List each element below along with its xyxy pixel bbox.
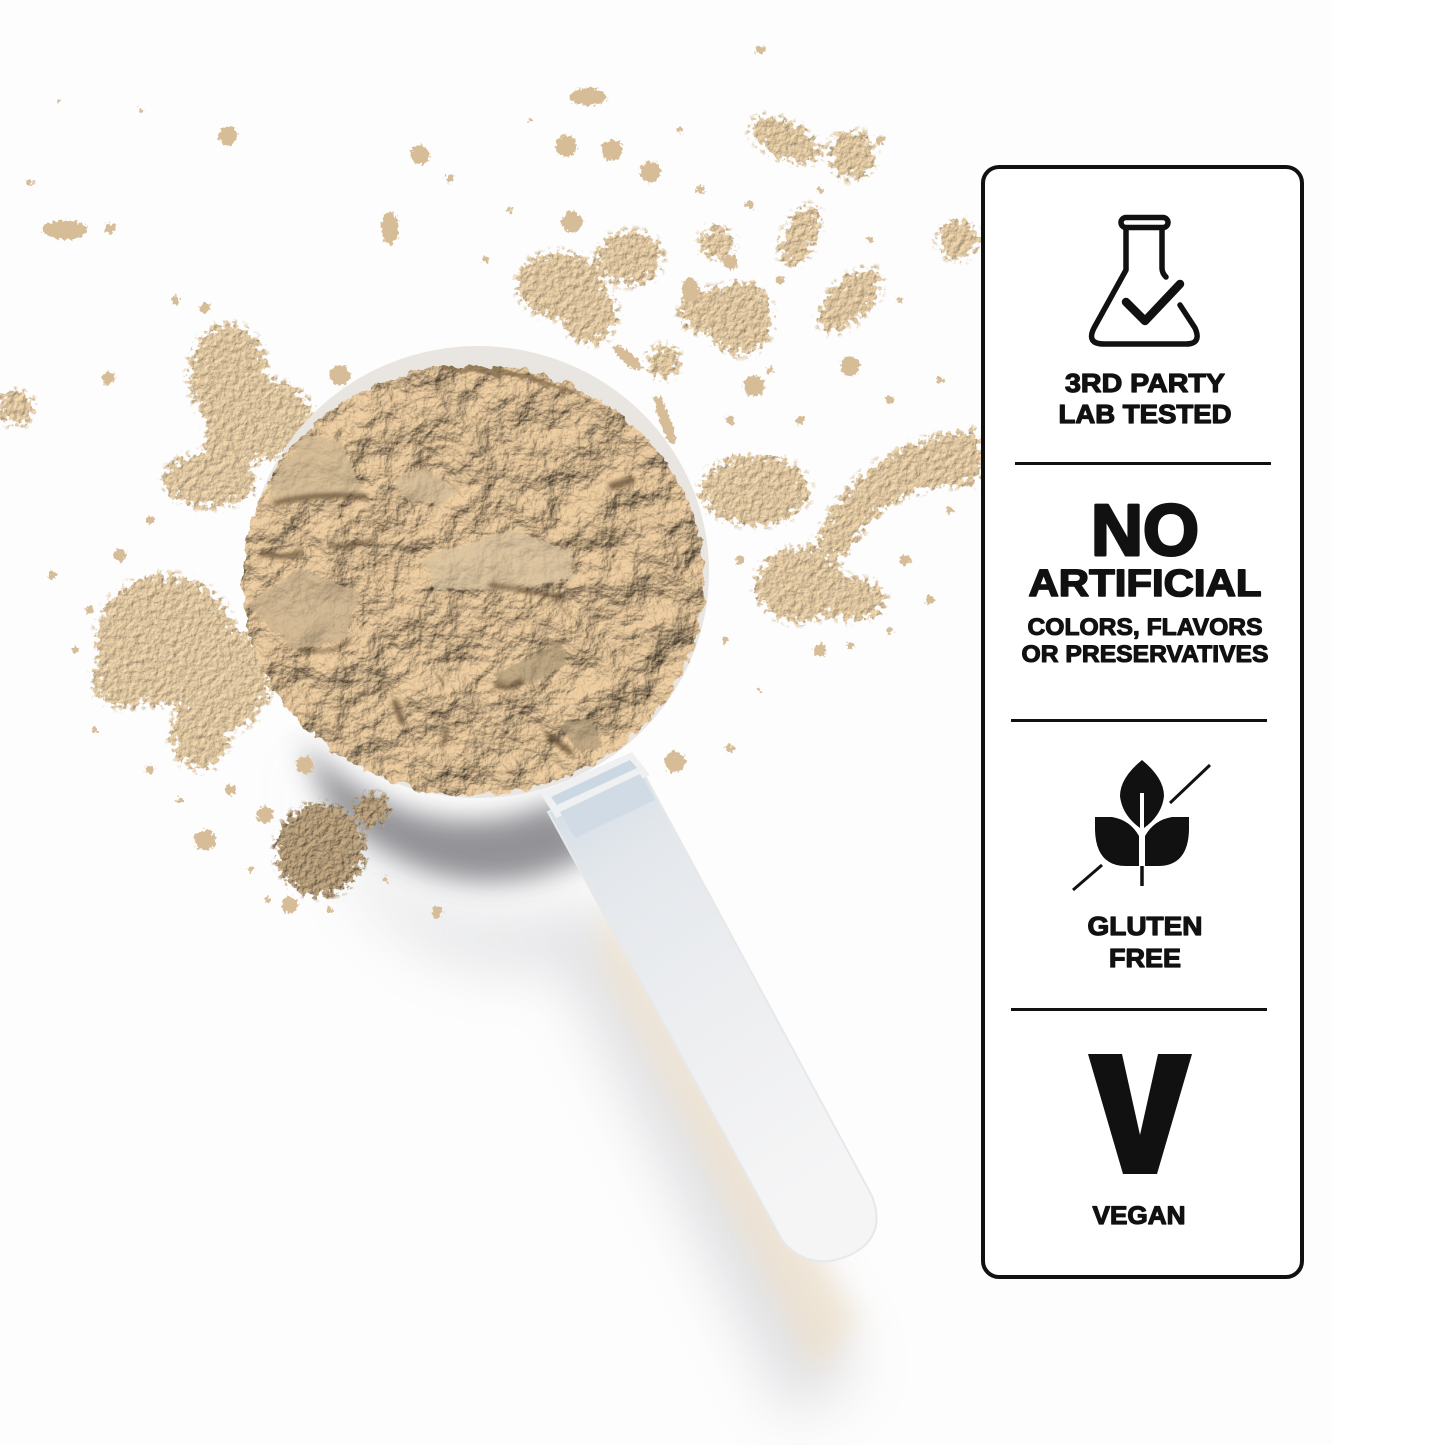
claim: no artificial colors, flavors or preservatives: NO	[1091, 491, 1199, 571]
claim: 3rd party lab tested: 3RD PARTY	[1065, 368, 1225, 398]
icon: crossed out wheat leaves	[1073, 760, 1210, 890]
scoop shadow	[290, 730, 860, 1420]
icon: flask with check mark	[1092, 218, 1197, 344]
claim: no artificial colors, flavors or preservatives: OR PRESERVATIVES	[1022, 641, 1268, 668]
powder crevices	[262, 480, 632, 752]
claim: no artificial colors, flavors or preservatives	[1022, 491, 1268, 668]
icon: vegan V	[1088, 1054, 1192, 1174]
claim: gluten free	[1088, 911, 1202, 973]
claim: gluten free: GLUTEN	[1088, 911, 1202, 941]
scoop rim	[247, 346, 709, 798]
claim: 3rd party lab tested	[1058, 368, 1232, 429]
loose powder particles	[27, 46, 953, 917]
claim: gluten free: FREE	[1109, 943, 1181, 973]
claim: no artificial colors, flavors or preservatives: COLORS, FLAVORS	[1028, 614, 1262, 641]
dark powder patch	[278, 796, 388, 894]
claim: vegan: VEGAN	[1092, 1202, 1186, 1230]
scoop handle	[540, 752, 877, 1261]
panel: product claims	[983, 167, 1302, 1277]
claim: no artificial colors, flavors or preservatives: ARTIFICIAL	[1028, 563, 1262, 605]
powder flakes	[245, 362, 615, 752]
powder surface	[230, 355, 720, 805]
scoop cup with powder	[230, 346, 720, 805]
loose powder clusters	[0, 0, 978, 767]
claim: 3rd party lab tested: LAB TESTED	[1058, 399, 1232, 429]
